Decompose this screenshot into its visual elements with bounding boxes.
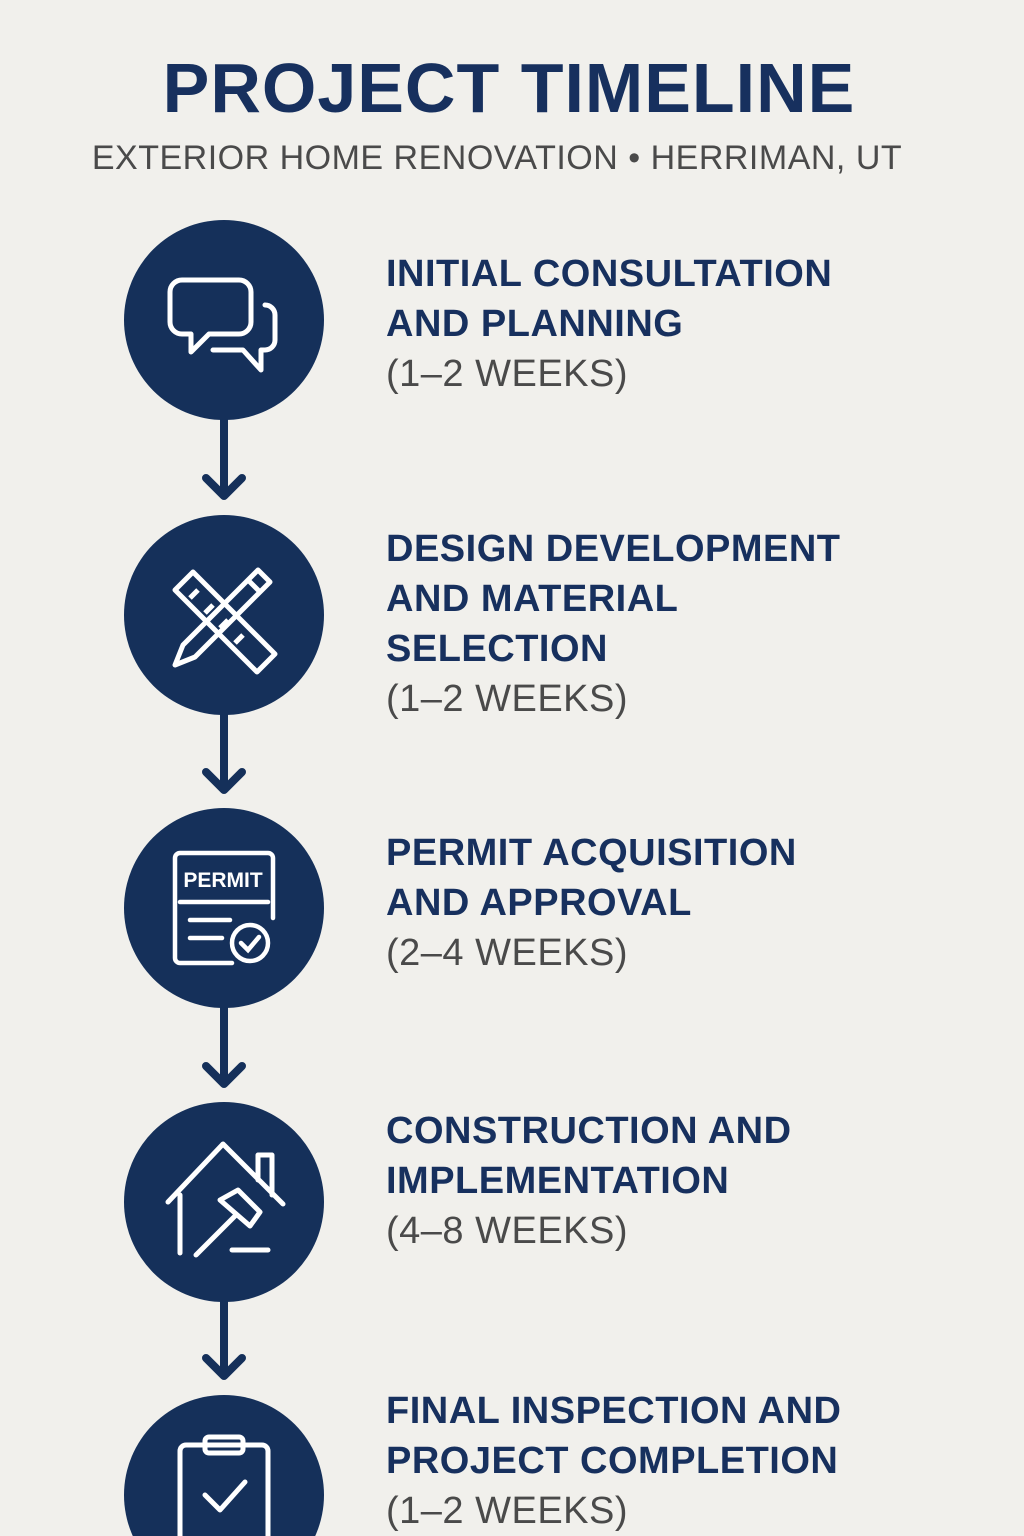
step 5 text <box>386 1390 841 1532</box>
step 5 text: (1–2 WEEKS) <box>386 1490 628 1532</box>
step 2 text: (1–2 WEEKS) <box>386 678 628 720</box>
step 3 text <box>386 832 797 974</box>
step 2 text <box>386 528 840 720</box>
icon: clipboard <box>124 1395 324 1536</box>
title: PROJECT TIMELINE <box>163 49 855 127</box>
step 4 text: IMPLEMENTATION <box>386 1160 729 1202</box>
step 1 text: AND PLANNING <box>386 303 683 345</box>
icon: chat bubbles <box>124 220 324 420</box>
step 3 text: AND APPROVAL <box>386 882 692 924</box>
step 5 text: FINAL INSPECTION AND <box>386 1390 841 1432</box>
step 1 text: (1–2 WEEKS) <box>386 353 628 395</box>
icon: house with hammer <box>124 1102 324 1302</box>
subtitle: EXTERIOR HOME RENOVATION • HERRIMAN, UT <box>92 139 902 177</box>
step 5 text: PROJECT COMPLETION <box>386 1440 838 1482</box>
step 2 text: AND MATERIAL <box>386 578 678 620</box>
step 2 text: SELECTION <box>386 628 608 670</box>
step 2 text: DESIGN DEVELOPMENT <box>386 528 840 570</box>
icon: permit document: PERMIT <box>183 869 263 892</box>
arrow 2 <box>206 705 242 790</box>
arrow 4 <box>206 1292 242 1376</box>
step 1 text: INITIAL CONSULTATION <box>386 253 832 295</box>
step 1 text <box>386 253 832 395</box>
icon: permit document <box>124 808 324 1008</box>
step 3 text: (2–4 WEEKS) <box>386 932 628 974</box>
step 4 text: CONSTRUCTION AND <box>386 1110 792 1152</box>
step 4 text <box>386 1110 792 1252</box>
icon: pencil and ruler <box>124 515 324 715</box>
step 3 text: PERMIT ACQUISITION <box>386 832 797 874</box>
step 4 text: (4–8 WEEKS) <box>386 1210 628 1252</box>
arrow 1 <box>206 410 242 496</box>
arrow 3 <box>206 998 242 1084</box>
